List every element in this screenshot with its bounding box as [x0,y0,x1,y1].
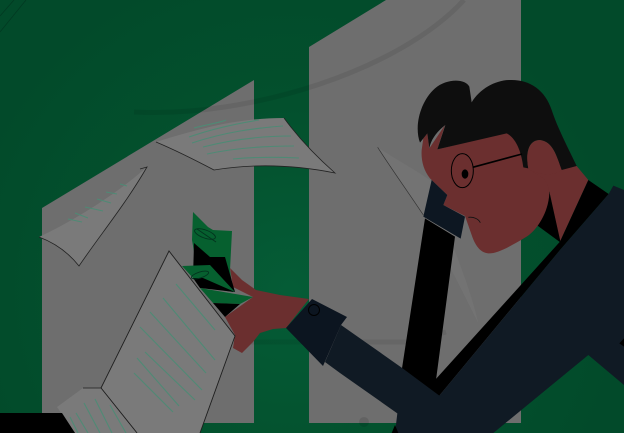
shadow: horizontal band [245,332,446,342]
face and hand [422,125,549,253]
top left faint lines [0,0,26,32]
bottom shadow [392,425,398,433]
paper: behind head [378,147,478,323]
cuff button [308,304,320,316]
money: banknotes [182,212,253,317]
man figure [325,80,624,433]
eye [462,169,468,179]
black shirt under jaw [537,192,561,243]
hand holding money [225,268,309,353]
shirt cuff at wrist [286,299,347,366]
glasses [451,154,522,188]
paper: flying top [156,118,335,173]
ear [527,140,562,174]
suit body and sleeve [325,186,624,433]
building: left grey block [42,80,254,423]
building: right grey block [309,0,521,423]
small blob [359,417,369,427]
frown line [468,217,480,223]
suit button detail [619,338,624,347]
shadow: sweeping arc [134,0,464,113]
paper: large open document [101,251,235,433]
cuff at forehead [423,180,465,239]
paper: flying left [39,167,147,266]
hair [418,80,577,170]
paper: lower left page [57,388,137,433]
neck [517,150,588,242]
black lapel [432,180,609,396]
arm: black forearm [393,218,455,397]
desk corner [0,413,75,433]
dollar symbol marks [191,226,217,281]
